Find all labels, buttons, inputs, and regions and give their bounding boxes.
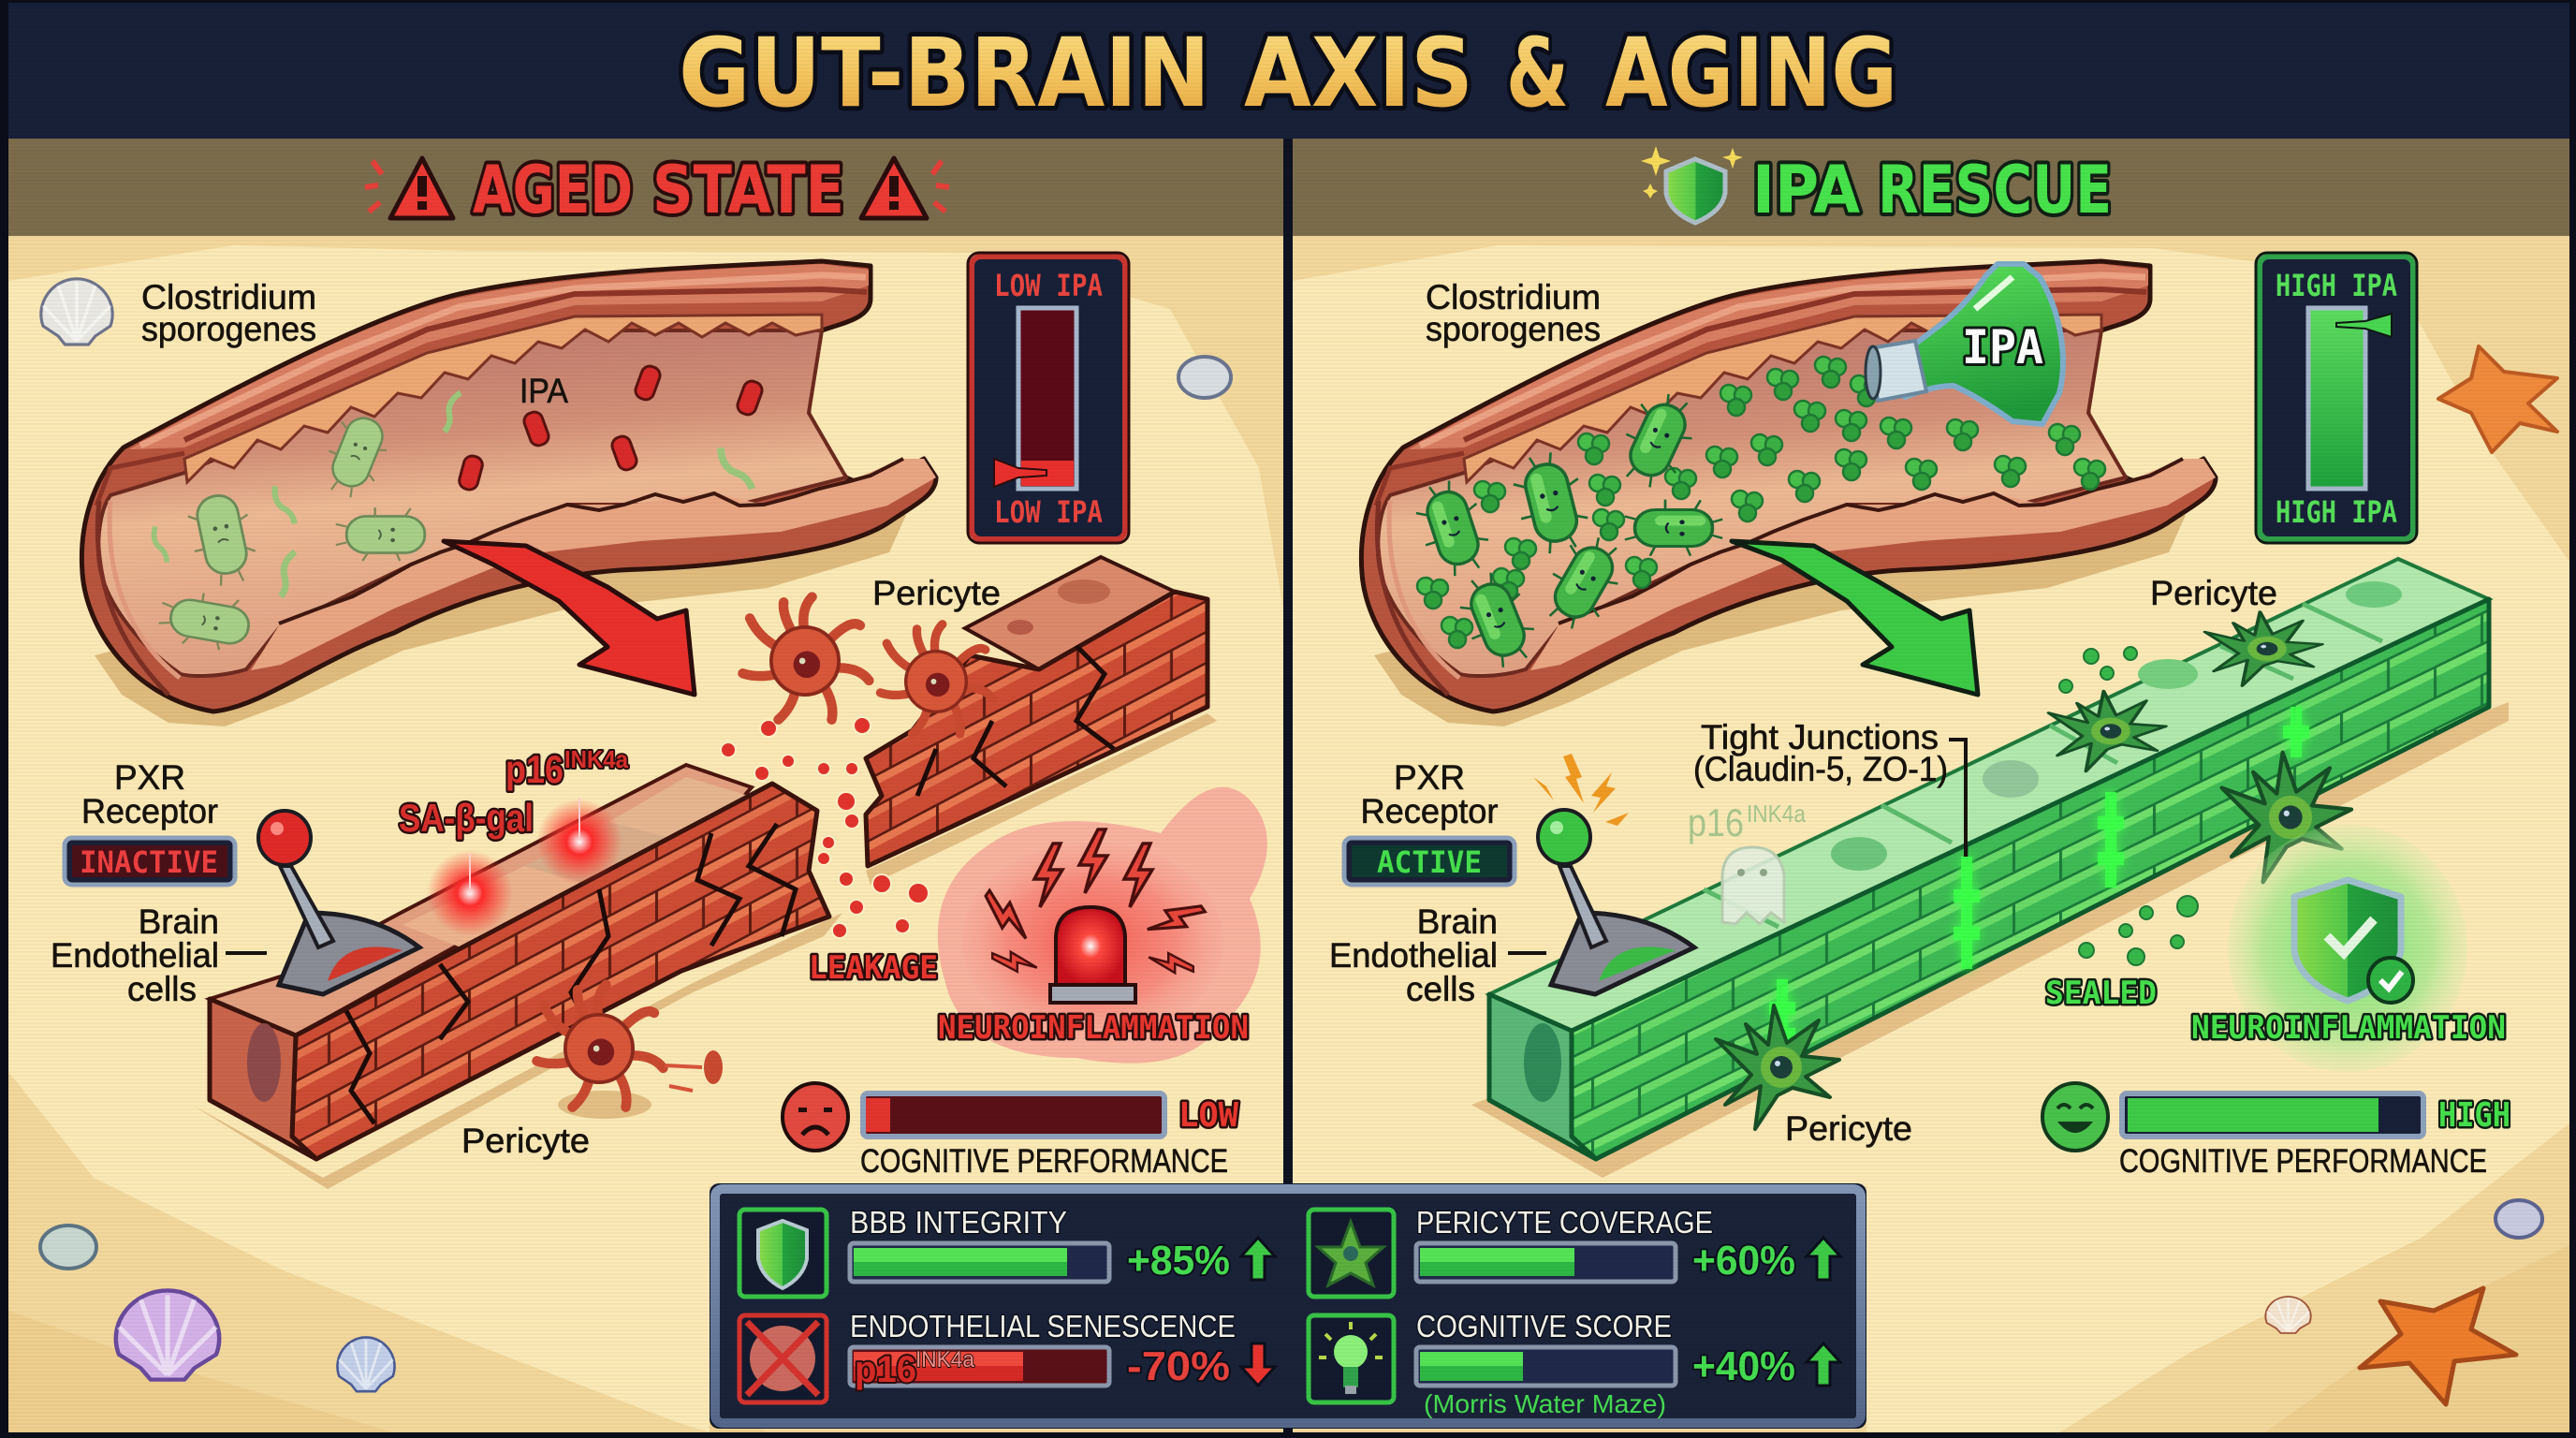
wall front bricks	[1572, 599, 2489, 1159]
panel: band aged state	[8, 139, 1283, 236]
barrier: aged broken wall	[192, 557, 1217, 1189]
metric: endothelial senescence: p16	[855, 1349, 916, 1390]
metric: endothelial senescence: INK4a	[915, 1347, 975, 1372]
label: neuroinflammation green: NEUROINFLAMMATION	[2191, 1009, 2506, 1047]
labels: senescence markers: p16	[505, 747, 564, 791]
label: IPA: IPA	[520, 372, 568, 410]
metric: pericyte coverage	[1309, 1205, 1840, 1297]
icon: grey rock bottom right	[2496, 1200, 2542, 1238]
icon: warning triangle left	[365, 158, 453, 218]
metric: cognitive score: COGNITIVE SCORE	[1416, 1309, 1672, 1343]
icon: cream shell	[2265, 1297, 2311, 1333]
icon: grey green pebble	[40, 1225, 96, 1269]
metric: endothelial senescence: -70%	[1127, 1343, 1230, 1389]
panel: band IPA rescue	[1293, 139, 2569, 236]
metric: BBB integrity: +85%	[1127, 1238, 1230, 1284]
title: AXIS	[1244, 18, 1473, 129]
label: brain endothelial left: cells	[127, 970, 197, 1008]
label: tight junctions	[1693, 718, 1966, 857]
pericyte right	[2222, 753, 2351, 882]
label: clostridium right: Clostridium	[1426, 278, 1601, 316]
metric: cognitive score	[1309, 1309, 1840, 1418]
meter: high cognitive performance: COGNITIVE PERFORMANCE	[2119, 1143, 2487, 1180]
labels: senescence markers: SA-β-gal	[399, 796, 534, 840]
tight junctions glow	[1769, 707, 2309, 1052]
label: PXR receptor right: PXR	[1394, 758, 1465, 797]
pericyte top 1	[2205, 611, 2322, 686]
label: pericyte upper right: Pericyte	[2150, 574, 2277, 612]
label: neuroinflammation red: NEUROINFLAMMATION	[938, 1009, 1249, 1047]
heading: IPA rescue: RESCUE	[1878, 152, 2112, 228]
icon: purple shell	[116, 1290, 219, 1380]
label: tight junctions: (Claudin-5, ZO-1)	[1693, 750, 1948, 788]
meter: high cognitive performance	[2042, 1083, 2510, 1180]
icon: grey rock top	[1178, 357, 1231, 398]
labels: senescence markers: INK4a	[564, 745, 628, 773]
label: clostridium left: Clostridium	[141, 278, 316, 316]
pericyte top 2	[2048, 691, 2166, 771]
icon: activation sparks	[1533, 754, 1629, 826]
wall left segment	[210, 765, 829, 1159]
title: GUT-BRAIN	[679, 18, 1210, 129]
labels: senescence markers	[399, 745, 628, 840]
bacteria healthy	[1409, 385, 1722, 674]
decorative shells right	[2265, 346, 2557, 1404]
label: PXR receptor left: Receptor	[81, 792, 218, 830]
decorative shells left	[40, 279, 1231, 1391]
label: sealed: SEALED	[2045, 975, 2157, 1012]
status: active: ACTIVE	[1377, 844, 1482, 880]
lever: active	[1538, 810, 1694, 994]
label: brain endothelial right: cells	[1406, 970, 1475, 1008]
label: brain endothelial right	[1329, 902, 1546, 1008]
metric: pericyte coverage: +60%	[1692, 1238, 1795, 1284]
icon: blue shell	[337, 1337, 395, 1391]
bacteria faded	[152, 390, 753, 654]
ghost: p16 fading	[1688, 800, 1784, 924]
metric: endothelial senescence: ENDOTHELIAL SENESCENCE	[850, 1309, 1236, 1343]
arrow: red flow	[444, 541, 695, 695]
label: INK4a faded: INK4a	[1747, 800, 1806, 828]
metric: cognitive score: +40%	[1692, 1343, 1795, 1389]
icon: warning triangle right	[861, 158, 949, 218]
shield: neuroinflammation resolved	[2191, 825, 2506, 1072]
pericyte front	[1716, 1005, 1839, 1129]
heading: IPA rescue: IPA	[1752, 152, 1860, 228]
meter: low cognitive performance: COGNITIVE PERFORMANCE	[860, 1143, 1228, 1180]
IPA molecules red	[458, 364, 765, 492]
label: brain endothelial left: Brain	[139, 902, 219, 941]
meter: low cognitive performance	[783, 1083, 1238, 1180]
metric: pericyte coverage: PERICYTE COVERAGE	[1416, 1205, 1713, 1240]
metric: endothelial senescence	[739, 1309, 1275, 1402]
title: &	[1506, 18, 1569, 129]
gauge: low IPA: LOW IPA	[994, 268, 1103, 303]
barrier: sealed green wall	[1471, 559, 2509, 1178]
label: PXR receptor left: PXR	[114, 758, 185, 797]
pericyte detaching 1	[743, 597, 869, 720]
icon: starfish bottom	[2360, 1288, 2516, 1404]
label: p16 faded: p16	[1688, 800, 1744, 844]
pericyte detaching 2	[880, 624, 993, 734]
panel: left gut	[81, 261, 936, 726]
label: tight junctions: Tight Junctions	[1701, 718, 1939, 756]
label: brain endothelial left: Endothelial	[51, 936, 219, 975]
metric: BBB integrity	[739, 1205, 1275, 1297]
label: pericyte upper left: Pericyte	[872, 574, 1001, 612]
wall right segment	[866, 557, 1208, 866]
label: brain endothelial right: Endothelial	[1329, 936, 1498, 975]
alarm: neuroinflammation	[938, 787, 1267, 1064]
label: PXR receptor right: Receptor	[1361, 792, 1498, 830]
leakage particles	[721, 717, 929, 938]
panel: sand background right	[1293, 236, 2569, 1432]
flask label: IPA	[1962, 320, 2043, 374]
lever: inactive	[258, 811, 419, 994]
wall end face	[1489, 994, 1596, 1159]
panel: right gut	[1361, 261, 2216, 726]
icon: IPA flask	[1866, 264, 2063, 424]
metric: cognitive score: (Morris Water Maze)	[1424, 1389, 1666, 1418]
meter: high cognitive performance: HIGH	[2438, 1096, 2510, 1135]
status: inactive	[65, 838, 235, 885]
heading: aged state: AGED	[473, 152, 633, 228]
label: leakage: LEAKAGE	[809, 949, 938, 987]
status: active	[1344, 838, 1515, 885]
status: inactive: INACTIVE	[80, 844, 218, 880]
marker glow: p16	[536, 798, 622, 885]
gauge: low IPA	[968, 253, 1129, 543]
gauge: high IPA: HIGH IPA	[2276, 494, 2397, 530]
metric: BBB integrity: BBB INTEGRITY	[850, 1205, 1067, 1240]
title: AGING	[1605, 18, 1897, 129]
wall top tiles	[1489, 559, 2489, 1031]
icon: shield with sparkles	[1641, 146, 1743, 223]
header: title bar	[8, 3, 2569, 139]
meter: low cognitive performance: LOW	[1178, 1096, 1238, 1135]
label: pericyte lower right: Pericyte	[1785, 1109, 1912, 1148]
gauge: low IPA: LOW IPA	[994, 494, 1103, 530]
gauge: high IPA: HIGH IPA	[2276, 268, 2397, 303]
icon: starfish top	[2438, 346, 2557, 452]
label: clostridium right: sporogenes	[1426, 310, 1601, 348]
marker glow: SA-beta-gal	[427, 850, 513, 936]
label: clostridium left: sporogenes	[141, 310, 316, 348]
label: brain endothelial right: Brain	[1417, 902, 1498, 941]
sealed particles	[2059, 647, 2198, 965]
panel: sand background left	[8, 236, 1283, 1432]
label: brain endothelial left	[51, 902, 267, 1008]
label: pericyte lower left: Pericyte	[461, 1122, 590, 1160]
arrow: green flow	[1732, 541, 1978, 695]
panel: results scoreboard	[710, 1183, 1866, 1429]
IPA clusters	[1417, 357, 2105, 648]
gauge: high IPA	[2256, 253, 2417, 543]
pericyte fallen	[537, 985, 723, 1119]
heading: aged state: STATE	[652, 152, 844, 228]
icon: white shell	[41, 279, 112, 345]
divider between panels	[1283, 139, 1293, 1187]
